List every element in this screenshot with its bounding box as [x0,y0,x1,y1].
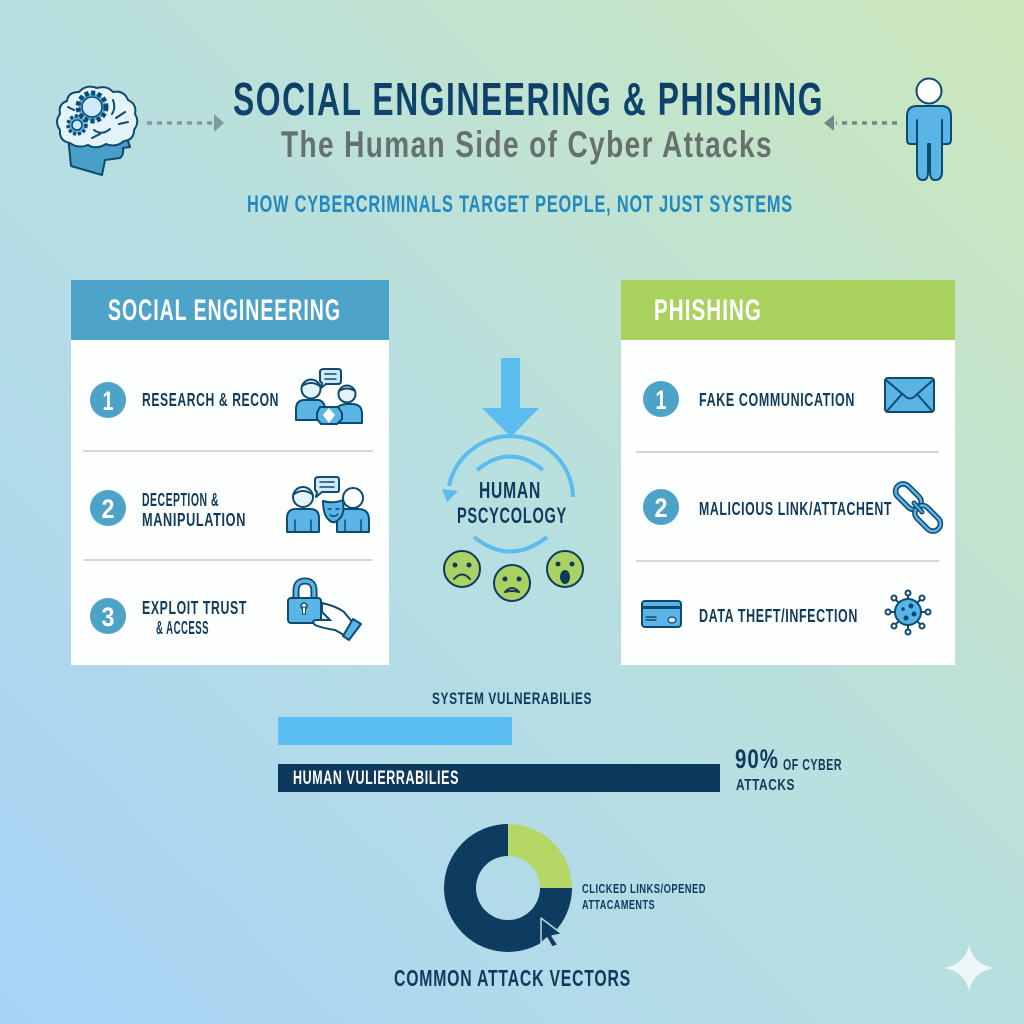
panel header: phishing: PHISHING [654,294,762,327]
subtitle: The Human Side of Cyber Attacks [281,124,773,165]
icon: chain link [892,481,944,534]
donut label: ATTACAMENTS [582,897,655,912]
bar: human [278,764,720,792]
arrow: down into psychology [482,358,539,437]
psychology label: HUMAN [479,477,541,503]
step 3: exploit trust and access: 3 [102,602,114,632]
bar chart: vulnerabilities [278,689,842,794]
icon: person [907,78,951,180]
panel header: social engineering: SOCIAL ENGINEERING [108,294,341,327]
face: sad [444,551,480,587]
step 1: research and recon: 1 [102,386,114,416]
diagram: human psychology [442,358,583,601]
stat: 90 percent: OF CYBER [783,757,842,774]
stat: 90 percent: ATTACKS [736,777,795,794]
face: worried [494,565,530,601]
arrow: person to title [824,115,897,131]
icon: virus [886,590,930,634]
step 3: exploit trust and access [90,598,247,638]
step 3: data theft or infection [642,601,858,627]
step 2: malicious link or attachment: MALICIOUS LINK/ATTACHENT [699,499,892,519]
step 2: malicious link or attachment [643,489,892,525]
donut label: CLICKED LINKS/OPENED [582,881,706,896]
donut heading: COMMON ATTACK VECTORS [394,965,631,991]
stat: 90 percent: 90% [735,744,779,774]
bar: system [278,717,512,745]
bar label: system: SYSTEM VULNERABILIES [432,689,592,708]
icon: cursor [541,918,562,947]
step 3: exploit trust and access: EXPLOIT TRUST [142,598,247,618]
psychology label [457,477,567,528]
step 1: fake communication: FAKE COMMUNICATION [699,390,855,410]
stat: 90 percent [735,744,842,794]
step 2: malicious link or attachment: 2 [654,493,668,523]
step 2: deception and manipulation: DECEPTION & [142,490,219,510]
donut label [582,881,706,912]
psychology cycle arcs [442,436,573,552]
bar: human: HUMAN VULIERRABILIES [293,768,459,789]
icon: sparkle [944,944,994,992]
icon: envelope [885,378,934,412]
donut chart: attack vectors [444,824,572,952]
step 1: research and recon: RESEARCH & RECON [142,390,279,410]
psychology label: PSCYCOLOGY [457,503,567,528]
step 2: deception and manipulation: 2 [102,494,114,524]
panel header: social engineering [71,280,389,340]
step 3: data theft or infection: DATA THEFT/INFECTION [699,606,858,626]
arrow: brain to title [147,114,224,132]
step 1: fake communication [643,381,855,417]
panel: phishing [621,280,955,665]
face: shocked [547,551,583,587]
icon: credit card [642,601,681,627]
icon: people with mask [287,477,369,532]
panel header: phishing [621,280,955,340]
icon: two people with speech bubble [296,369,362,424]
step 2: deception and manipulation: MANIPULATION [142,510,246,530]
step 3: exploit trust and access: & ACCESS [156,618,209,638]
step 2: deception and manipulation [90,490,246,530]
icon: padlock and hand [288,581,361,640]
icon: brain with gears [57,87,137,175]
step 1: research and recon [90,382,279,418]
panel: social engineering [71,280,389,665]
step 1: fake communication: 1 [656,385,666,415]
